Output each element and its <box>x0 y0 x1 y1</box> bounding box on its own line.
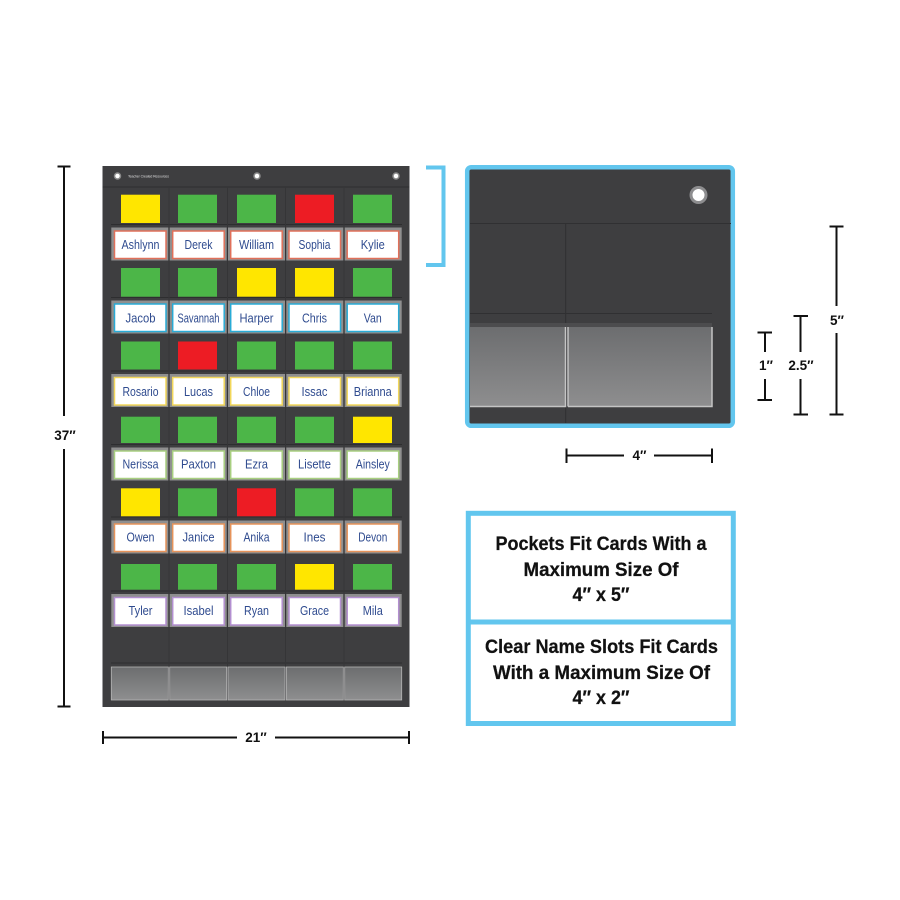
empty clear name slots <box>111 667 402 700</box>
dimension: 21 inches <box>103 730 409 745</box>
pockets size text: 4″ x 5″ <box>572 584 630 606</box>
row 2: Harper <box>240 310 274 326</box>
row 4: Paxton <box>181 456 216 472</box>
clear slots <box>470 323 712 406</box>
dimension: 37 inches: 37″ <box>54 428 76 443</box>
row 1 <box>111 195 402 260</box>
row 4: Nerissa <box>122 456 159 472</box>
row 3: Issac <box>302 384 328 399</box>
row 3: Brianna <box>354 384 392 399</box>
dimension: 1 inch: 1″ <box>759 358 774 373</box>
clear name slots size text: Clear Name Slots Fit Cards <box>485 636 718 658</box>
row 5 <box>111 488 402 554</box>
dimension: 21 inches: 21″ <box>245 730 267 745</box>
row 1: Sophia <box>298 237 331 252</box>
row 3: Rosario <box>122 384 158 399</box>
row 4: Ainsley <box>356 456 390 472</box>
row 6: Isabel <box>184 603 214 618</box>
dimension: 5 inches <box>830 226 845 414</box>
row 5: Janice <box>182 530 214 545</box>
row 4: Lisette <box>298 456 331 472</box>
row 1: Derek <box>184 237 213 252</box>
row 3: Chloe <box>243 384 270 399</box>
dimension: 5 inches: 5″ <box>830 313 845 328</box>
info box <box>466 513 735 724</box>
dimension: 1 inch <box>758 332 774 400</box>
grommet <box>691 188 706 202</box>
row 5: Devon <box>358 530 387 545</box>
row 2: Van <box>364 310 382 326</box>
clear name slots size text: With a Maximum Size Of <box>493 662 710 684</box>
grommets <box>114 173 399 179</box>
row 6: Ryan <box>244 603 269 618</box>
pockets size text: Pockets Fit Cards With a <box>496 533 707 555</box>
row 2: Chris <box>302 310 327 326</box>
row 6: Tyler <box>128 603 153 618</box>
row 4: Ezra <box>245 456 269 472</box>
row 6: Mila <box>363 603 383 618</box>
brand text: Teacher Created Resources <box>128 174 169 178</box>
row 2: Savannah <box>178 310 220 326</box>
dimension: 2.5 inches <box>788 316 814 414</box>
pocket chart <box>102 166 410 707</box>
row 2: Jacob <box>126 310 156 326</box>
row 6: Grace <box>300 603 329 618</box>
clear name slots size text: 4″ x 2″ <box>572 687 630 709</box>
dimension: 2.5 inches: 2.5″ <box>788 358 814 373</box>
zoom bracket <box>426 168 444 265</box>
row 3: Lucas <box>184 384 213 399</box>
row 3 <box>111 342 402 407</box>
dimension: 4 inches <box>566 448 712 463</box>
row 5: Ines <box>304 530 326 545</box>
dimension: 4 inches: 4″ <box>633 448 647 463</box>
pockets size text <box>496 533 707 606</box>
pockets size text: Maximum Size Of <box>524 559 679 581</box>
row 1: Ashlynn <box>122 237 160 252</box>
row 6 <box>111 564 402 627</box>
row 1: William <box>239 237 274 252</box>
row 2 <box>111 268 402 334</box>
clear name slots size text <box>485 636 718 709</box>
row 4 <box>111 417 402 480</box>
row 5: Owen <box>126 530 154 545</box>
row 1: Kylie <box>361 237 385 252</box>
dimension: 37 inches <box>54 166 76 707</box>
detail panel <box>467 167 733 426</box>
row 5: Anika <box>244 530 270 545</box>
